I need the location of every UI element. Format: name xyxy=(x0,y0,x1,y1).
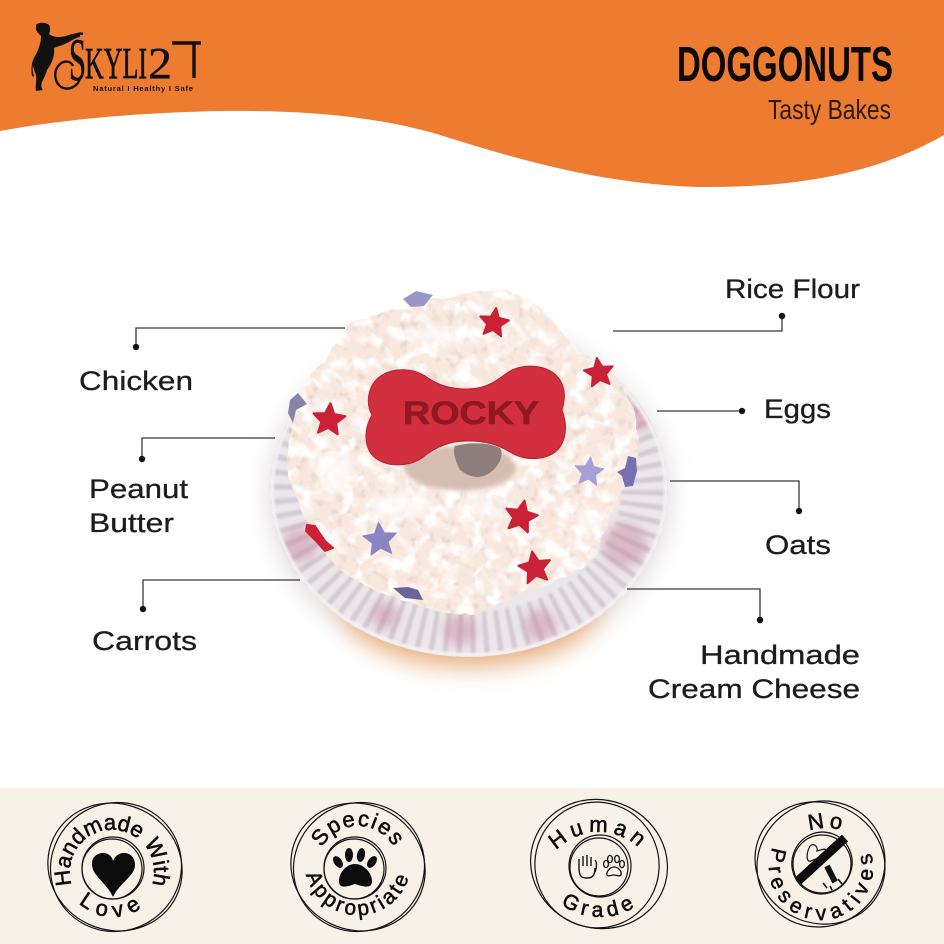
callout: Peanut Butter: Butter xyxy=(89,508,174,538)
paper liner xyxy=(270,323,668,657)
product: decorated doughnut xyxy=(268,290,670,667)
badge text: Appropriate: Appropriate xyxy=(305,874,408,920)
icon: small paw xyxy=(604,855,624,876)
callout: Peanut Butter: Peanut xyxy=(89,474,189,504)
icon: dog silhouette xyxy=(31,23,80,91)
frosting xyxy=(287,290,639,615)
badge text: Love: Love xyxy=(80,892,140,918)
callout: Chicken: Chicken xyxy=(79,366,193,396)
soft shadow xyxy=(268,327,670,667)
badge text: Species: Species xyxy=(312,812,402,846)
header: orange wave xyxy=(0,0,944,187)
badge text: Grade: Grade xyxy=(564,894,633,918)
logo stylised letters: 2 xyxy=(148,39,172,88)
callout: Eggs xyxy=(657,394,831,424)
logo swirl tail xyxy=(55,34,83,89)
callout: Carrots: Carrots xyxy=(92,626,197,656)
callout: Rice Flour: Rice Flour xyxy=(725,274,860,304)
bone biscuit xyxy=(366,366,566,465)
logo letter S: S xyxy=(69,27,86,93)
callout: Chicken xyxy=(79,328,345,396)
icon: crossed brush xyxy=(798,838,845,890)
callout: Peanut Butter xyxy=(89,438,275,538)
badge text: Preservatives: Preservatives xyxy=(768,848,874,920)
callout: Carrots xyxy=(92,580,300,656)
purple sprinkle stars xyxy=(288,291,637,600)
badge text: No: No xyxy=(808,812,842,830)
badge text: Handmade With: Handmade With xyxy=(54,816,170,886)
icon: paw xyxy=(331,847,379,887)
callout: Handmade Cream Cheese: Cream Cheese xyxy=(648,674,860,704)
footer band xyxy=(0,788,944,944)
doughnut hole xyxy=(404,443,516,490)
badge: Handmade With Love xyxy=(47,802,183,932)
badge: Species Appropriate xyxy=(290,802,426,932)
icon: heart xyxy=(92,853,135,897)
logo tagline: Natural I Healthy I Safe xyxy=(93,84,193,93)
callout: Rice Flour xyxy=(613,274,860,331)
red sprinkle stars xyxy=(306,306,615,584)
badge: No Preservatives xyxy=(754,800,886,928)
callout: Eggs: Eggs xyxy=(764,394,831,424)
callout: Oats xyxy=(670,481,831,560)
callout: Handmade Cream Cheese xyxy=(627,589,860,704)
subtitle: Tasty Bakes xyxy=(768,94,891,125)
icon: hand xyxy=(579,855,596,878)
frosting highlights xyxy=(317,327,606,530)
logo wordmark: KYLI xyxy=(85,39,147,88)
bone lettering: ROCKY xyxy=(403,395,539,431)
logo: Skylish xyxy=(31,23,201,93)
badge text: Human: Human xyxy=(548,820,644,850)
callout: Handmade Cream Cheese: Handmade xyxy=(700,640,860,670)
logo stylised bar xyxy=(172,43,201,78)
badge: Human Grade xyxy=(530,798,668,930)
callout: Oats: Oats xyxy=(765,530,831,560)
